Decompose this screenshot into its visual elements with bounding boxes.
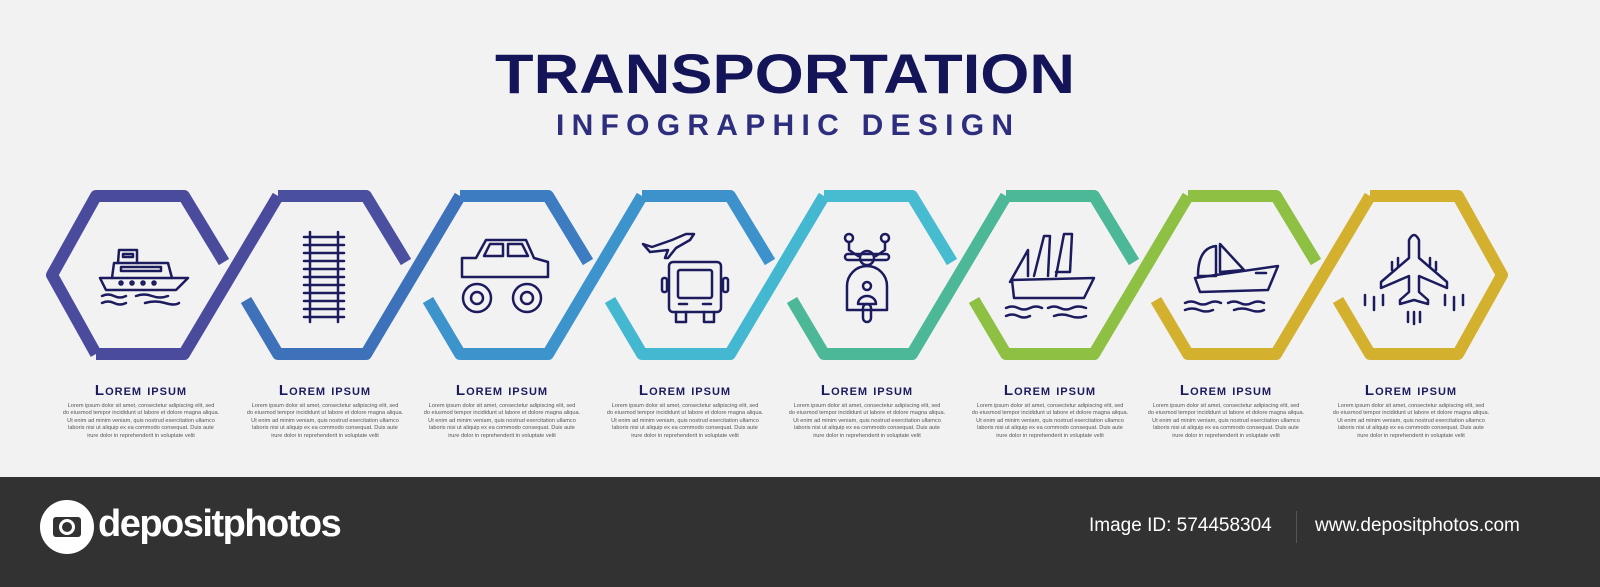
icon: airport bus [643,234,728,322]
text: item 1: Lorem ipsum [95,382,187,399]
text: item 7: Lorem ipsum [1180,382,1272,399]
text: item 8 [1333,382,1489,439]
text: item 6: do eiusmod tempor incididunt ut labore et dolore magna aliqua. [972,410,1128,416]
hex 7 [1156,196,1370,354]
text: item 7 [1148,382,1304,439]
text: item 4: irure dolor in reprehenderit in voluptate velit [631,433,739,439]
hex 5 [792,196,1006,354]
icon: scooter [845,234,889,322]
text: item 3: Ut enim ad minim veniam, quis nostrud exercitation ullamco [428,418,576,424]
text: item 4: Lorem ipsum dolor sit amet, consectetur adipiscing elit, sed [612,403,758,409]
text: item 6 [972,382,1128,439]
text: item 5 [789,382,945,439]
text: item 1: do eiusmod tempor incididunt ut labore et dolore magna aliqua. [63,410,219,416]
text blocks [63,382,1489,439]
text: item 7: do eiusmod tempor incididunt ut labore et dolore magna aliqua. [1148,410,1304,416]
text: item 8: do eiusmod tempor incididunt ut labore et dolore magna aliqua. [1333,410,1489,416]
text: item 2: laboris nisi ut aliquip ex ea commodo consequat. Duis aute [252,425,398,431]
text: item 1: Ut enim ad minim veniam, quis nostrud exercitation ullamco [67,418,215,424]
text: item 4: Lorem ipsum [639,382,731,399]
text: item 6: laboris nisi ut aliquip ex ea commodo consequat. Duis aute [977,425,1123,431]
text: item 3: do eiusmod tempor incididunt ut labore et dolore magna aliqua. [424,410,580,416]
text: item 3: Lorem ipsum dolor sit amet, consectetur adipiscing elit, sed [429,403,575,409]
text: item 5: Lorem ipsum [821,382,913,399]
text: item 4: laboris nisi ut aliquip ex ea commodo consequat. Duis aute [612,425,758,431]
text: item 5: Ut enim ad minim veniam, quis nostrud exercitation ullamco [793,418,941,424]
text: item 5: irure dolor in reprehenderit in voluptate velit [813,433,921,439]
text: item 4: do eiusmod tempor incididunt ut labore et dolore magna aliqua. [607,410,763,416]
text: item 2 [247,382,403,439]
text: item 7: Ut enim ad minim veniam, quis nostrud exercitation ullamco [1152,418,1300,424]
text: item 3: Lorem ipsum [456,382,548,399]
icon: railway [304,232,344,322]
text: item 5: Lorem ipsum dolor sit amet, consectetur adipiscing elit, sed [794,403,940,409]
footer: url: www.depositphotos.com [1315,515,1520,536]
text: item 3: laboris nisi ut aliquip ex ea commodo consequat. Duis aute [429,425,575,431]
icon: sailing boat [1185,244,1278,312]
text: item 7: laboris nisi ut aliquip ex ea commodo consequat. Duis aute [1153,425,1299,431]
text: item 1: laboris nisi ut aliquip ex ea commodo consequat. Duis aute [68,425,214,431]
hex 6 [974,196,1188,354]
logo: depositphotos [98,503,340,545]
text: item 8: irure dolor in reprehenderit in voluptate velit [1357,433,1465,439]
text: item 6: Lorem ipsum dolor sit amet, consectetur adipiscing elit, sed [977,403,1123,409]
text: item 7: irure dolor in reprehenderit in voluptate velit [1172,433,1280,439]
icon: monster truck [462,240,548,312]
text: item 4 [607,382,763,439]
icon: airplane [1365,235,1463,324]
icon: galleon [1006,234,1094,318]
text: item 6: Ut enim ad minim veniam, quis nostrud exercitation ullamco [976,418,1124,424]
icon: camera logo [40,500,94,554]
text: item 1: Lorem ipsum dolor sit amet, consectetur adipiscing elit, sed [68,403,214,409]
text: item 8: Lorem ipsum dolor sit amet, consectetur adipiscing elit, sed [1338,403,1484,409]
title: INFOGRAPHIC DESIGN [556,109,1013,142]
text: item 3: irure dolor in reprehenderit in voluptate velit [448,433,556,439]
text: item 7: Lorem ipsum dolor sit amet, consectetur adipiscing elit, sed [1153,403,1299,409]
text: item 8: Ut enim ad minim veniam, quis nostrud exercitation ullamco [1337,418,1485,424]
hex 4 [610,196,824,354]
footer bar [0,477,1600,587]
footer: image id: Image ID: 574458304 [1089,515,1272,536]
text: item 5: laboris nisi ut aliquip ex ea commodo consequat. Duis aute [794,425,940,431]
text: item 8: Lorem ipsum [1365,382,1457,399]
text: item 2: irure dolor in reprehenderit in voluptate velit [271,433,379,439]
logo [40,500,340,554]
text: item 1: irure dolor in reprehenderit in voluptate velit [87,433,195,439]
title: TRANSPORTATION [495,42,1075,105]
text: item 2: Lorem ipsum [279,382,371,399]
text: item 5: do eiusmod tempor incididunt ut labore et dolore magna aliqua. [789,410,945,416]
hex 1 [52,196,278,354]
text: item 4: Ut enim ad minim veniam, quis nostrud exercitation ullamco [611,418,759,424]
text: item 1 [63,382,219,439]
text: item 6: irure dolor in reprehenderit in voluptate velit [996,433,1104,439]
title [495,42,1075,142]
icons [98,230,1464,326]
text: item 6: Lorem ipsum [1004,382,1096,399]
hex 3 [428,196,642,354]
text: item 2: do eiusmod tempor incididunt ut labore et dolore magna aliqua. [247,410,403,416]
icon: yacht [100,250,188,304]
text: item 2: Ut enim ad minim veniam, quis nostrud exercitation ullamco [251,418,399,424]
text: item 8: laboris nisi ut aliquip ex ea commodo consequat. Duis aute [1338,425,1484,431]
text: item 3 [424,382,580,439]
hexagon chain [46,190,1508,360]
hex 8 [1338,196,1502,354]
text: item 2: Lorem ipsum dolor sit amet, consectetur adipiscing elit, sed [252,403,398,409]
hex 2 [246,196,460,354]
